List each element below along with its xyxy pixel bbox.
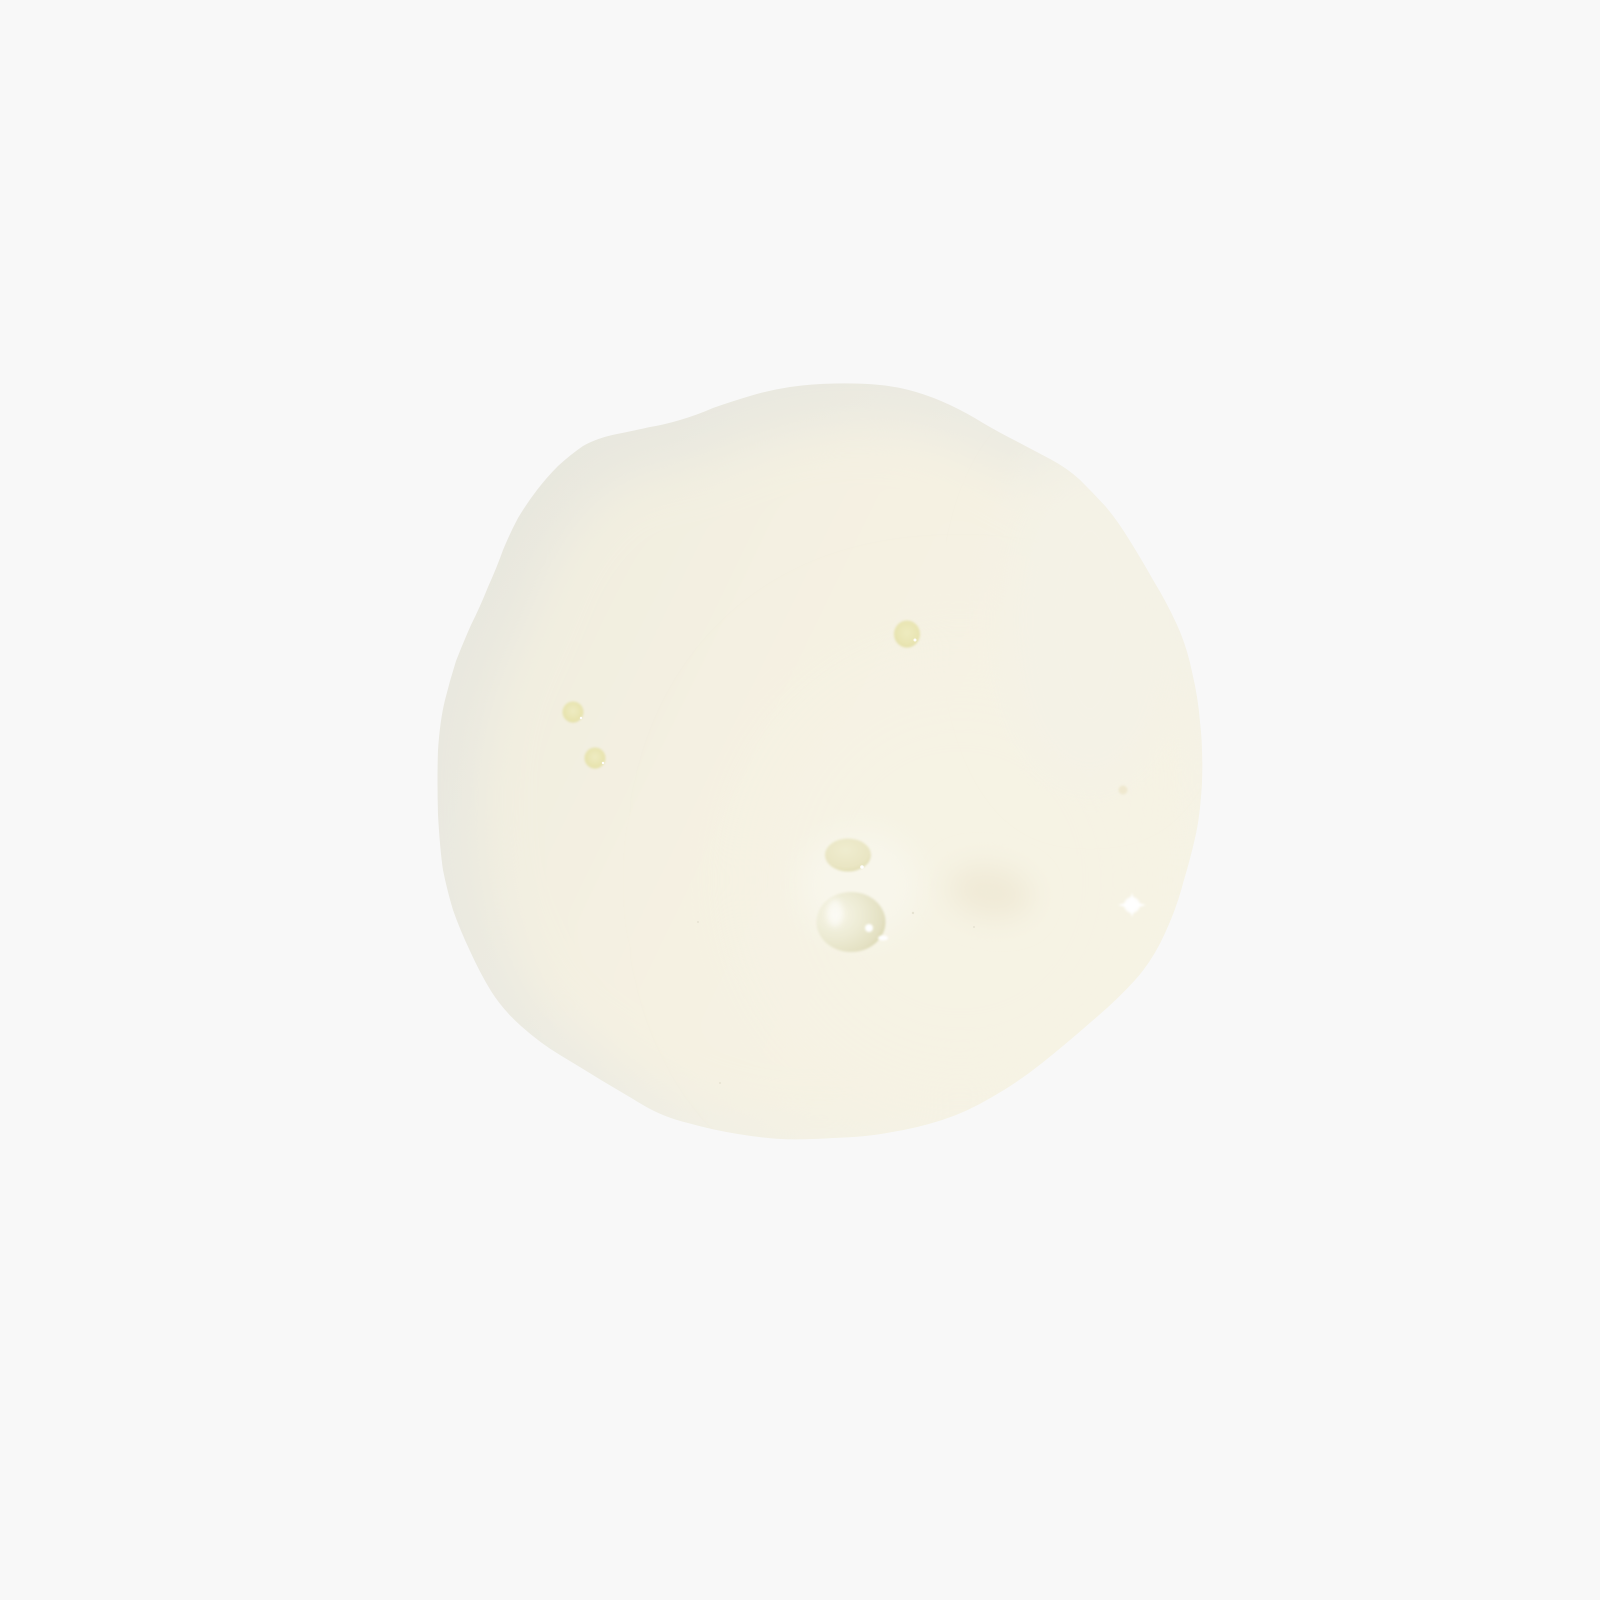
faint speck xyxy=(1118,786,1128,794)
oval droplet xyxy=(825,838,871,872)
pale halo around droplets xyxy=(800,830,920,940)
illustration: cream swatch on pale background xyxy=(438,384,1202,1140)
small droplet upper right xyxy=(894,620,920,648)
dimple shadow xyxy=(960,872,1020,912)
small droplet left lower xyxy=(584,748,606,768)
sparkle highlight xyxy=(1118,893,1146,917)
large droplet xyxy=(816,892,888,952)
cream blob xyxy=(438,383,1202,1139)
lighter band near the right edge xyxy=(1000,450,1180,790)
small droplet left upper xyxy=(562,702,584,722)
tiny specks xyxy=(697,912,975,1084)
